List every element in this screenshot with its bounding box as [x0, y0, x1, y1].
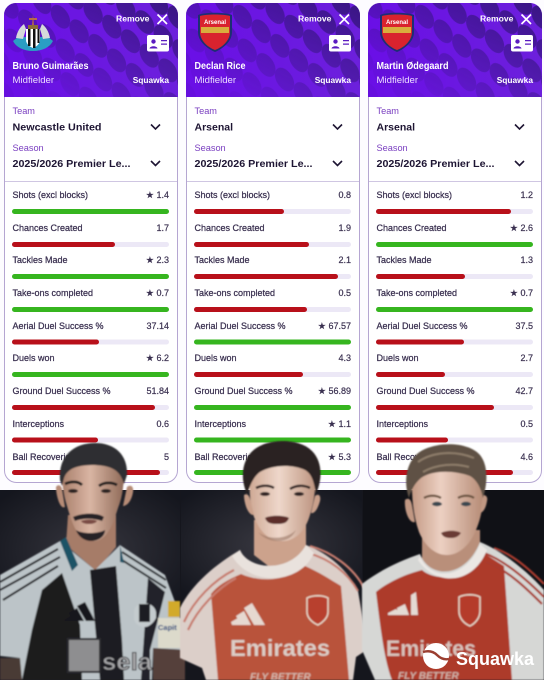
- stat: tackles: [376, 255, 533, 279]
- shirt sponsor: [386, 636, 476, 680]
- logo: Squawka: [423, 643, 535, 669]
- stat: chances: 1.7: [156, 223, 169, 233]
- text: position: Midfielder: [12, 75, 55, 86]
- hair: [406, 444, 486, 498]
- eyes, nose, mouth: [424, 496, 474, 498]
- stat: take-ons: [376, 288, 533, 312]
- stat: aerial: [376, 321, 533, 344]
- beard and mouth: [73, 514, 105, 541]
- head: [62, 446, 124, 541]
- stat: chances: [194, 223, 351, 247]
- text: season value: 2025/2026 Premier Le...: [194, 158, 313, 170]
- stat: tackles: Tackles Made: [12, 255, 68, 265]
- stat: ground: [194, 386, 351, 410]
- text: position: Midfielder: [194, 75, 237, 86]
- stat: ground: [376, 386, 533, 410]
- stat: tackles: ★ 2.3: [146, 255, 169, 265]
- stat: duels: 4.3: [338, 353, 351, 363]
- text: season value: 2025/2026 Premier Le...: [376, 158, 495, 170]
- stat: ground: Ground Duel Success %: [194, 386, 293, 396]
- stat: interceptions: Interceptions: [376, 419, 429, 429]
- stat: take-ons: ★ 0.7: [510, 288, 533, 298]
- shirt sponsor: Emirates: [386, 636, 476, 661]
- stat rows: [12, 190, 169, 475]
- stat: tackles: 1.3: [520, 255, 533, 265]
- neck: [422, 530, 480, 582]
- stat: aerial: ★ 67.57: [318, 321, 351, 331]
- stat: take-ons: [194, 288, 351, 312]
- icon: close: [158, 14, 167, 24]
- stat: shots: 1.2: [520, 190, 533, 200]
- stat: duels: 2.7: [520, 353, 533, 363]
- stat: chances: Chances Created: [12, 223, 83, 233]
- head: [412, 452, 484, 555]
- stat: tackles: Tackles Made: [194, 255, 250, 265]
- icon: team chevron: [151, 124, 160, 129]
- jersey: [362, 542, 544, 680]
- crest: [307, 596, 328, 625]
- text: team value: Arsenal: [194, 122, 233, 134]
- stat: ball recoveries: Ball Recoveries: [194, 452, 258, 462]
- stat: aerial: [12, 321, 169, 344]
- stat: interceptions: 0.6: [156, 419, 169, 429]
- stat: ball recoveries: [194, 452, 351, 475]
- stat: tackles: Tackles Made: [376, 255, 432, 265]
- icon: Arsenal crest: Arsenal: [386, 20, 408, 26]
- eyes, nose, mouth: [256, 486, 310, 489]
- stat: take-ons: 0.5: [338, 288, 351, 298]
- stat: chances: Chances Created: [376, 223, 447, 233]
- stat: ball recoveries: ★ 5.3: [328, 452, 351, 462]
- stat: take-ons: Take-ons completed: [376, 288, 457, 298]
- icon: id card: [329, 35, 351, 52]
- stat: chances: [376, 223, 533, 247]
- photo: Bruno Guimarães: Capit: [158, 623, 177, 632]
- adidas logo: [231, 603, 265, 625]
- adidas logo: [63, 602, 95, 621]
- stat: aerial: Aerial Duel Success %: [376, 321, 468, 331]
- stat: ground: 42.7: [515, 386, 533, 396]
- text: team value: Arsenal: [376, 122, 415, 134]
- icon: id card: [147, 35, 169, 52]
- crest: [134, 603, 156, 627]
- head: [250, 448, 315, 541]
- logo mark: [423, 643, 449, 669]
- icon: season chevron: [333, 161, 342, 166]
- shirt sponsor: [230, 635, 330, 680]
- icon: close: [340, 14, 349, 24]
- text: season label: Season: [194, 143, 226, 153]
- text: team value: Newcastle United: [12, 122, 102, 134]
- stat: tackles: 2.1: [338, 255, 351, 265]
- stat: ground: [12, 386, 169, 410]
- stat: duels: ★ 6.2: [146, 353, 169, 363]
- card header: [368, 3, 542, 97]
- stat: duels: [12, 353, 169, 377]
- stat: interceptions: [12, 419, 169, 442]
- stat: interceptions: ★ 1.1: [328, 419, 351, 429]
- text: player name: Martin Ødegaard: [376, 61, 448, 72]
- stat: take-ons: Take-ons completed: [194, 288, 275, 298]
- stat: shots: [376, 190, 533, 214]
- stat: ground: 51.84: [146, 386, 169, 396]
- text: brand: Squawka: [315, 75, 351, 85]
- stat: ball recoveries: Ball Recoveries: [12, 452, 76, 462]
- wordmark: Squawka: [456, 649, 535, 669]
- stat: aerial: [194, 321, 351, 344]
- stat: shots: Shots (excl blocks): [376, 190, 452, 200]
- text: brand: Squawka: [497, 75, 533, 85]
- photo: Bruno Guimarães: [0, 443, 188, 680]
- text: remove action: Remove: [116, 14, 150, 24]
- stat: shots: 0.8: [338, 190, 351, 200]
- stat: duels: Duels won: [194, 353, 237, 363]
- sleeve badge: [158, 618, 182, 648]
- stat: duels: [194, 353, 351, 377]
- panel: Bruno Guimarães card: [4, 3, 178, 482]
- stat: ground: Ground Duel Success %: [376, 386, 475, 396]
- icon: Arsenal crest: [198, 13, 232, 52]
- hair: [60, 443, 127, 486]
- icon: team chevron: [333, 124, 342, 129]
- stat: interceptions: [376, 419, 533, 442]
- jersey: [180, 545, 368, 680]
- stat: interceptions: Interceptions: [12, 419, 65, 429]
- card header: [4, 3, 178, 97]
- eyes and brows: [65, 482, 117, 486]
- text: player name: Declan Rice: [194, 61, 246, 72]
- stat: shots: ★ 1.4: [146, 190, 169, 200]
- icon: season chevron: [151, 161, 160, 166]
- stat: ball recoveries: [376, 452, 533, 475]
- stat: tackles: [12, 255, 169, 279]
- text: season label: Season: [376, 143, 408, 153]
- stat: chances: ★ 2.6: [510, 223, 533, 233]
- neck and arms: [66, 515, 116, 571]
- stat rows: [194, 190, 351, 475]
- text: remove action: Remove: [298, 14, 332, 24]
- icon: close: [522, 14, 531, 24]
- neck: [254, 520, 306, 575]
- stat: ball recoveries: Ball Recoveries: [376, 452, 440, 462]
- stat: shots: Shots (excl blocks): [12, 190, 88, 200]
- stat: take-ons: ★ 0.7: [146, 288, 169, 298]
- text: team label: Team: [12, 106, 35, 116]
- text: season value: 2025/2026 Premier Le...: [12, 158, 131, 170]
- stat: shots: [194, 190, 351, 214]
- stat: duels: Duels won: [12, 353, 55, 363]
- stat: aerial: Aerial Duel Success %: [194, 321, 286, 331]
- icon: team chevron: [515, 124, 524, 129]
- text: remove action: Remove: [480, 14, 514, 24]
- jersey: [0, 541, 188, 680]
- card header: [186, 3, 360, 97]
- icon: Arsenal crest: [380, 13, 414, 52]
- photo: Declan Rice: [180, 441, 368, 680]
- shirt sponsor: [68, 639, 153, 676]
- photo: Martin Ødegaard: [362, 444, 544, 680]
- stat: duels: Duels won: [376, 353, 419, 363]
- icon: id card: [511, 35, 533, 52]
- panel: Declan Rice card: [186, 3, 360, 482]
- stat: tackles: [194, 255, 351, 279]
- stat: chances: 1.9: [338, 223, 351, 233]
- stat: ball recoveries: [12, 452, 169, 475]
- panel: Martin Ødegaard card: [368, 3, 542, 482]
- shirt sponsor: sela: [102, 649, 153, 676]
- panel: photo backdrop: [0, 490, 544, 680]
- stat: duels: [376, 353, 533, 377]
- icon: season chevron: [515, 161, 524, 166]
- stat: aerial: 37.5: [515, 321, 533, 331]
- stat: interceptions: Interceptions: [194, 419, 247, 429]
- stat: ball recoveries: 4.6: [520, 452, 533, 462]
- stat: take-ons: Take-ons completed: [12, 288, 93, 298]
- text: team label: Team: [376, 106, 399, 116]
- stat: ground: ★ 56.89: [318, 386, 351, 396]
- shirt sponsor: Emirates: [230, 635, 330, 661]
- stat: chances: [12, 223, 169, 247]
- stat: shots: Shots (excl blocks): [194, 190, 270, 200]
- stat: interceptions: 0.5: [520, 419, 533, 429]
- adidas logo: [388, 592, 418, 615]
- text: brand: Squawka: [133, 75, 169, 85]
- panel: page background: [0, 0, 544, 490]
- stat: interceptions: [194, 419, 351, 442]
- stat rows: [376, 190, 533, 475]
- icon: Newcastle crest: [13, 14, 53, 51]
- hair: [243, 441, 321, 494]
- text: position: Midfielder: [376, 75, 419, 86]
- stat: chances: Chances Created: [194, 223, 265, 233]
- stat: aerial: 37.14: [146, 321, 169, 331]
- stat: ball recoveries: 5: [164, 452, 169, 462]
- stat: take-ons: [12, 288, 169, 312]
- text: team label: Team: [194, 106, 217, 116]
- icon: Arsenal crest: Arsenal: [204, 20, 226, 26]
- stat: aerial: Aerial Duel Success %: [12, 321, 104, 331]
- crest: [459, 595, 480, 626]
- text: season label: Season: [12, 143, 44, 153]
- stat: shots: [12, 190, 169, 214]
- text: player name: Bruno Guimarães: [12, 61, 89, 72]
- stat: ground: Ground Duel Success %: [12, 386, 111, 396]
